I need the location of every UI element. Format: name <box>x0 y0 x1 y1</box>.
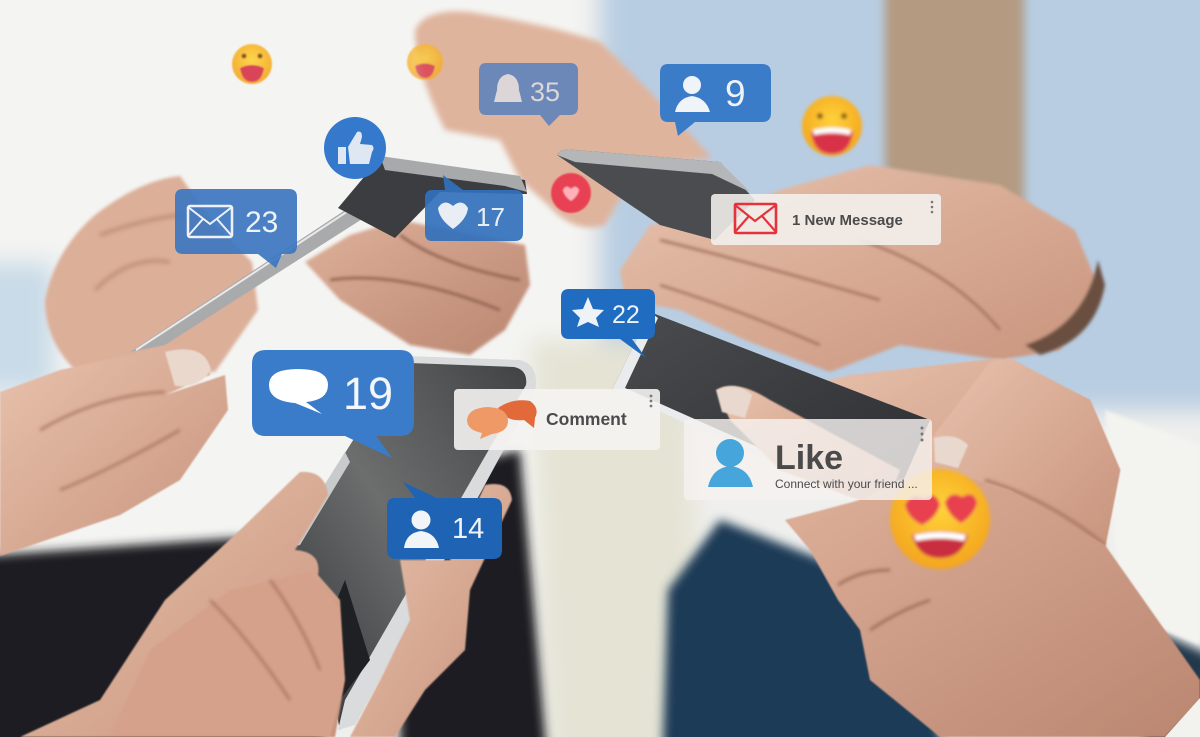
badge: bell 35: 35 <box>530 77 560 107</box>
notification: Like: Connect with your friend ... <box>775 477 918 491</box>
badge: person 9 <box>660 64 771 136</box>
emoji: heart eyes <box>890 469 990 569</box>
badge: person 9: 9 <box>725 73 746 114</box>
emoji: top centre smile <box>407 44 443 80</box>
badge: person 14 <box>387 482 502 559</box>
notification: Comment: Comment <box>546 409 627 429</box>
hand: thumb left of phone <box>716 386 900 510</box>
badge: thumbs up <box>324 117 386 179</box>
hand: bottom left <box>20 472 345 737</box>
notification: 1 New Message: 1 New Message <box>792 212 903 229</box>
badge: person 14: 14 <box>452 513 484 545</box>
phone: upper right <box>557 150 755 240</box>
hand: right thumb over phone <box>930 358 1120 548</box>
badge: mail 23 <box>175 189 297 268</box>
phone: upper centre <box>338 156 527 238</box>
badge: heart 17: 17 <box>476 202 505 232</box>
notification: Like: Like <box>775 439 843 477</box>
hand: top left <box>45 176 258 372</box>
notification: Comment <box>454 389 660 450</box>
badge: message 19 <box>252 350 414 458</box>
badge: message 19: 19 <box>343 368 393 419</box>
phone: large centre <box>285 356 536 730</box>
phone: upper left slim <box>130 195 378 352</box>
hand: centre bottom right of phone <box>350 484 512 737</box>
icon: red heart circle <box>551 173 591 213</box>
badge: star 22 <box>561 289 655 358</box>
hand: top centre <box>415 11 712 228</box>
phone: right tilted <box>612 312 930 516</box>
hand: left lower <box>0 345 228 556</box>
hand: lower right <box>785 470 1200 737</box>
notification: Like <box>684 419 932 500</box>
badge: star 22: 22 <box>612 301 640 329</box>
hand: lower right behind phone <box>770 358 1120 545</box>
emoji: top left smile <box>232 44 272 84</box>
hand: upper centre <box>305 220 530 355</box>
hand: upper right <box>620 165 1105 372</box>
cuff: bottom right <box>1165 698 1200 737</box>
badge: mail 23: 23 <box>245 206 278 239</box>
emoji: top right smile <box>802 96 862 156</box>
badge: bell 35 <box>479 63 578 126</box>
notification: 1 New Message <box>711 194 941 245</box>
badge: heart 17 <box>425 175 523 241</box>
